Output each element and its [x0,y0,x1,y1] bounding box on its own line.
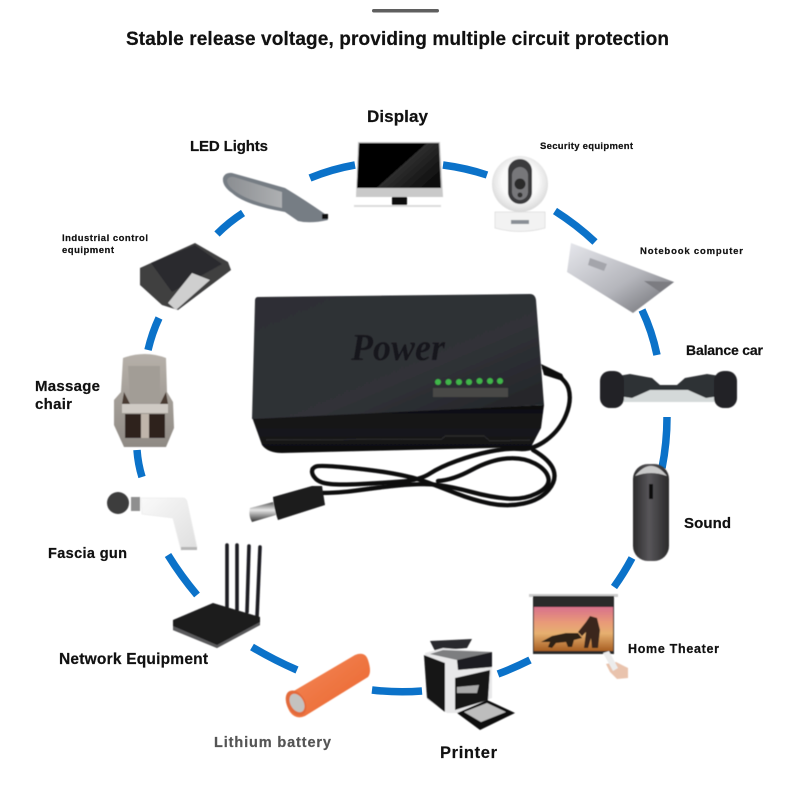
icon: security camera [492,156,548,232]
icon: monitor [354,142,443,207]
label: security equipment: Security equipment [540,141,634,152]
device: display [354,107,443,207]
device: security equipment [492,141,634,232]
icon: battery cell [281,654,370,719]
icon: hand with remote [606,662,628,679]
icon: notebook [567,243,674,313]
label: massage chair: chair [35,396,72,413]
label: lithium battery: Lithium battery [214,735,331,751]
adapter cable [312,368,570,505]
label: notebook computer: Notebook computer [640,246,743,257]
label: massage chair: Massage [35,378,100,395]
icon: hoverboard [600,371,737,408]
icon: street lamp [223,173,328,222]
icon: speaker [633,464,669,561]
icon: printer [424,639,515,730]
power logo: Power [350,327,446,369]
top handle bar [372,9,439,12]
device: notebook computer [567,243,743,313]
DC plug body [273,486,325,520]
label: industrial control equipment: Industrial control [62,233,148,244]
label: LED lights: LED Lights [190,138,268,155]
device: industrial control equipment [62,233,231,310]
device: massage chair [35,354,174,447]
label: fascia gun: Fascia gun [48,546,127,562]
label: home theater: Home Theater [628,642,719,656]
icon: router [173,545,260,648]
icon: chair [114,354,174,447]
power adapter [249,294,570,522]
device: lithium battery [214,654,370,751]
cable strain relief [541,364,566,382]
device: network equipment [59,545,260,668]
label: industrial control equipment: equipment [62,245,115,256]
icon: massage gun [107,492,197,550]
label: massage chair [35,378,100,413]
front seam [266,436,530,441]
label: network equipment: Network Equipment [59,651,208,668]
title: Stable release voltage, providing multiple circuit protection [126,29,669,50]
icon: control unit [140,243,231,310]
LED indicators [435,378,503,385]
adapter top face [252,294,544,419]
device: LED lights [190,138,328,222]
label: industrial control equipment [62,233,148,256]
adapter front face [252,405,544,453]
blue circular connector ring [137,165,667,692]
device: home theater [529,594,719,679]
label: printer: Printer [440,744,498,762]
device: fascia gun [48,492,197,562]
device: balance car [600,342,764,408]
label: sound: Sound [684,515,731,532]
device: sound [633,464,731,561]
icon: projection screen [529,594,628,679]
voltage label strip [433,388,508,397]
label: balance car: Balance car [686,342,764,358]
DC plug metal tip [249,502,276,522]
device: printer [424,639,515,762]
label: display: Display [367,107,429,126]
